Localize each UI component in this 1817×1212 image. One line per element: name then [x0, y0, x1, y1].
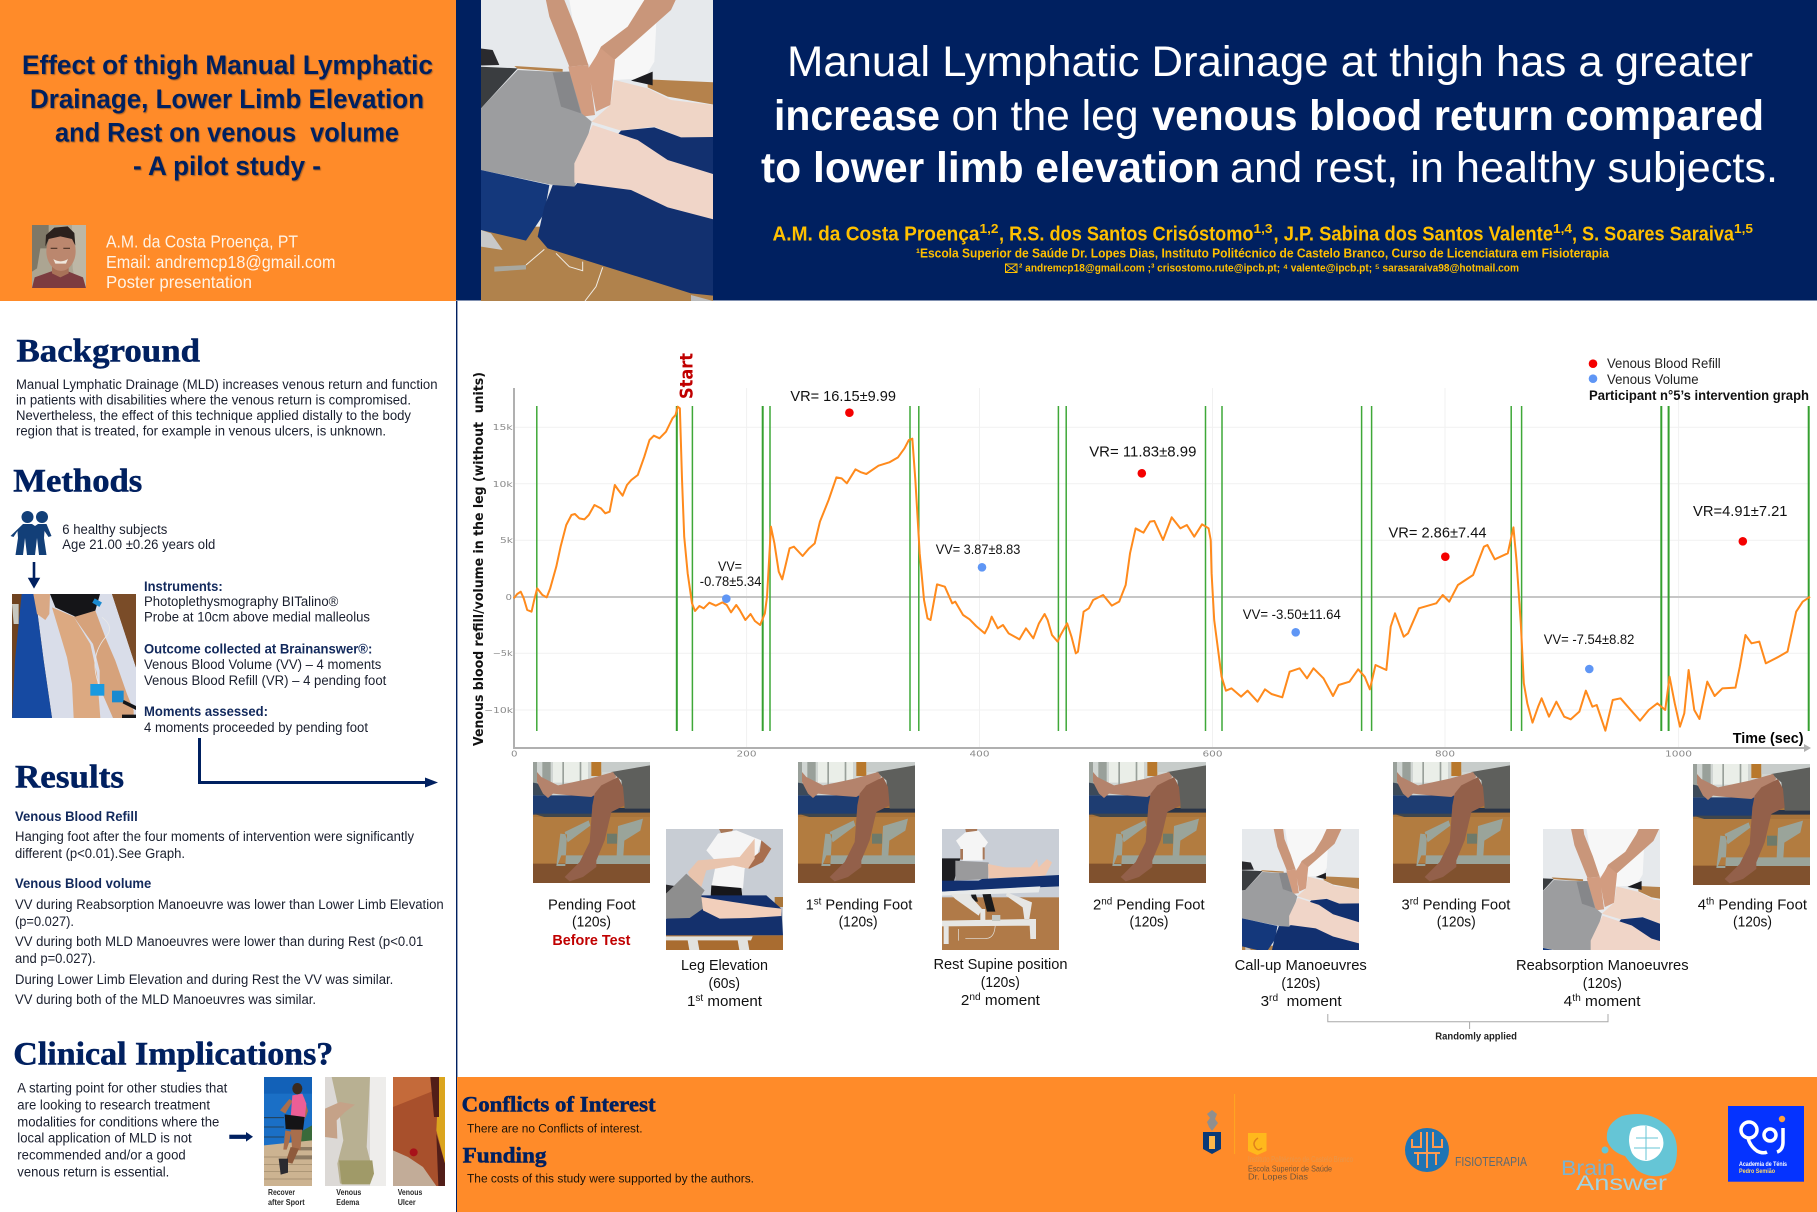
instruments text: Instruments: [144, 579, 223, 594]
headline: and rest, in healthy subjects. [1230, 144, 1778, 192]
protocol step: call-up manoeuvres [1226, 820, 1374, 1010]
affiliation: ¹Escola Superior de Saúde Dr. Lopes Dias, Instituto Politécnico de Castelo Branco, Curso de Licenciatura em Fisioterapia [916, 245, 1610, 260]
protocol step: third pending foot: Pending Foot [1418, 896, 1511, 913]
authors: 1,3 [1254, 222, 1273, 236]
protocol step: pending foot before test: Pending Foot [548, 896, 636, 913]
protocol step: pending foot before test: (120s) [572, 914, 611, 931]
legend [1589, 356, 1809, 403]
venous volume points [722, 563, 1594, 673]
heading: methods: Methods [13, 464, 142, 500]
instruments text: Probe at 10cm above medial malleolus [144, 610, 370, 625]
arrow: to conditions [229, 1132, 253, 1142]
protocol step: reabsorption manoeuvres: (120s) [1583, 975, 1622, 992]
logo: brainanswer [1561, 1114, 1677, 1195]
venous blood volume results [15, 876, 444, 1007]
panel: background [16, 334, 438, 438]
arrow: subjects to setup [30, 562, 38, 586]
clinical implications text: modalities for conditions where the [17, 1114, 219, 1129]
zero line [514, 596, 1810, 598]
photo captions [268, 1188, 423, 1207]
photo captions: Edema [336, 1198, 360, 1207]
protocol step: fourth pending foot: th [1706, 896, 1714, 907]
logo: fisioterapia: FISIOTERAPIA [1455, 1154, 1527, 1169]
author details: Email: andremcp18@gmail.com [106, 252, 336, 272]
panel: clinical implications [13, 1036, 445, 1207]
panel: title block [0, 0, 456, 301]
venous blood refill results: Venous Blood Refill [15, 809, 138, 824]
protocol step: rest supine [934, 829, 1068, 1009]
title: Drainage, Lower Limb Elevation [30, 84, 424, 114]
logo: tennis academy [1728, 1106, 1804, 1182]
headline [761, 38, 1778, 192]
protocol step: call-up manoeuvres: rd [1269, 993, 1278, 1004]
headline: Manual Lymphatic Drainage at thigh has a greater [787, 38, 1753, 86]
protocol step: second pending foot: 2 [1093, 896, 1101, 913]
protocol step: third pending foot: (120s) [1437, 914, 1476, 931]
y axis tick labels [484, 423, 513, 715]
phase markers [537, 406, 1809, 731]
photo: presenting author [32, 225, 86, 288]
photo: sensor on leg [12, 594, 136, 718]
authors: 1,4 [1553, 222, 1572, 236]
instruments text [144, 579, 370, 625]
value annotations: VR= 16.15±9.99 [790, 388, 896, 405]
subjects text: Age 21.00 ±0.26 years old [62, 537, 215, 552]
photo: venous ulcer [393, 1077, 445, 1186]
subjects text: 6 healthy subjects [62, 522, 168, 537]
y axis tick labels: −10k [484, 706, 513, 715]
title: - A pilot study - [133, 151, 321, 181]
value annotations [700, 388, 1787, 647]
outcome text: Venous Blood Refill (VR) – 4 pending foot [144, 673, 387, 688]
conflicts of interest: Conflicts of Interest [462, 1092, 656, 1117]
contact emails: ² andremcp18@gmail.com ;³ crisostomo.rute@ipcb.pt; ⁴ valente@ipcb.pt; ⁵ sarasaraiva98@hotmail.com [1019, 263, 1519, 275]
legend: Participant n°5’s intervention graph [1589, 388, 1809, 403]
photo captions: after Sport [268, 1198, 305, 1207]
venous blood volume results: and p=0.027). [15, 951, 96, 966]
value annotations: VV= -7.54±8.82 [1544, 632, 1634, 647]
funding [463, 1143, 754, 1186]
photo: venous edema [325, 1077, 386, 1186]
y axis tick labels: 15k [493, 423, 513, 432]
logo: polytechnic institute [1203, 1094, 1353, 1182]
protocol step: reabsorption manoeuvres: Reabsorption Manoeuvres [1516, 957, 1689, 974]
heading: clinical implications: Clinical Implications? [13, 1036, 333, 1072]
x axis tick labels: 0 [511, 750, 518, 758]
background text: Nevertheless, the effect of this technique applied distally to the body [16, 408, 411, 423]
headline: to lower limb elevation [761, 144, 1220, 192]
logo: brainanswer: Brain [1561, 1157, 1615, 1180]
photo captions: Venous [398, 1188, 423, 1197]
title [22, 50, 433, 181]
protocol step: second pending foot [1089, 762, 1206, 931]
conflicts of interest [462, 1092, 656, 1136]
logo: polytechnic institute: Dr. Lopes Dias [1248, 1172, 1308, 1182]
protocol step: third pending foot [1393, 762, 1511, 931]
venous blood refill results: different (p<0.01).See Graph. [15, 846, 185, 861]
protocol step: rest supine: nd [969, 992, 981, 1003]
value annotations: -0.78±5.34 [700, 574, 762, 589]
background text [16, 377, 438, 438]
axes [513, 388, 1811, 752]
value annotations: VR= 2.86±7.44 [1388, 525, 1486, 542]
venous refill points [845, 408, 1747, 561]
authors: 1,5 [1734, 222, 1753, 236]
protocol step: rest supine: (120s) [981, 974, 1020, 991]
instruments text: Photoplethysmography BITalino® [144, 594, 338, 609]
protocol step: call-up manoeuvres: 3 [1261, 993, 1269, 1010]
value annotations: VV= [718, 559, 742, 574]
x axis tick labels: 200 [736, 750, 756, 758]
panel: methods [10, 464, 387, 735]
gridlines [514, 388, 1810, 748]
protocol step: pending foot before test: Before Test [552, 932, 630, 949]
panel: footer [457, 1077, 1817, 1212]
headline: on the leg [952, 92, 1138, 140]
protocol step: first pending foot: (120s) [839, 914, 878, 931]
venous blood volume results: (p=0.027). [15, 914, 74, 929]
y axis tick labels: 0 [506, 593, 512, 602]
clinical implications text: are looking to research treatment [17, 1097, 210, 1112]
clinical implications text: A starting point for other studies that [17, 1080, 228, 1095]
logo: tennis academy: Academia de Ténis [1739, 1162, 1788, 1168]
protocol step: first pending foot: 1 [806, 896, 814, 913]
authors: 1,2 [980, 222, 999, 236]
venous blood volume results: VV during both MLD Manoeuvres were lower than during Rest (p<0.01 [15, 934, 423, 949]
heading: background: Background [16, 334, 200, 370]
y axis tick labels: 5k [500, 536, 513, 545]
protocol step: fourth pending foot: 4 [1698, 896, 1706, 913]
headline: venous blood return compared [1152, 92, 1764, 140]
funding: The costs of this study were supported by the authors. [467, 1174, 754, 1186]
logo: tennis academy: Pedro Semião [1739, 1169, 1775, 1175]
column divider [456, 301, 457, 1212]
clinical implications text: recommended and/or a good [17, 1147, 186, 1162]
x axis tick labels: 600 [1202, 750, 1222, 758]
author details: Poster presentation [106, 272, 252, 292]
protocol step: second pending foot: Pending Foot [1112, 896, 1205, 913]
moments text: 4 moments proceeded by pending foot [144, 720, 368, 735]
background text: in patients with disabilities where the venous return is compromised. [16, 392, 411, 407]
protocol step: fourth pending foot [1693, 764, 1810, 931]
authors: A.M. da Costa Proença [772, 224, 980, 246]
protocol step: reabsorption manoeuvres [1504, 808, 1708, 1034]
protocol step: second pending foot: (120s) [1130, 914, 1168, 931]
venous blood refill results [15, 809, 414, 861]
protocol step: first pending foot: Pending Foot [821, 896, 913, 913]
venous blood volume results: VV during both of the MLD Manoeuvres was similar. [15, 992, 316, 1007]
legend: Venous Blood Refill [1607, 356, 1721, 371]
x axis tick labels: 800 [1435, 750, 1455, 758]
author details: A.M. da Costa Proença, PT [106, 232, 298, 252]
heading: results: Results [15, 759, 124, 795]
venous blood volume results: VV during Reabsorption Manoeuvre was lower than Lower Limb Elevation [15, 897, 444, 912]
protocol step: reabsorption manoeuvres: th [1572, 993, 1581, 1004]
icon: envelope [1006, 264, 1017, 272]
protocol step: second pending foot: nd [1101, 896, 1112, 907]
value annotations: VR= 11.83±8.99 [1089, 444, 1196, 461]
venous blood refill results: Hanging foot after the four moments of intervention were significantly [15, 829, 414, 844]
protocol step: leg elevation: moment [703, 993, 763, 1010]
funding: Funding [463, 1143, 546, 1168]
y axis title: Venous blood refill/volume in the leg (without units) [471, 372, 487, 746]
clinical implications text [17, 1080, 228, 1179]
protocol step: reabsorption manoeuvres: moment [1581, 993, 1641, 1010]
outcome text: Outcome collected at Brainanswer®: [144, 642, 372, 657]
headline: increase [774, 92, 940, 140]
protocol step: pending foot before test [533, 762, 650, 949]
protocol step: call-up manoeuvres: Call-up Manoeuvres [1235, 957, 1367, 974]
photo captions: Recover [268, 1188, 295, 1197]
protocol step: fourth pending foot: Pending Foot [1714, 896, 1808, 913]
start label: Start [676, 353, 698, 399]
protocol step: rest supine: 2 [961, 992, 969, 1009]
logo: brainanswer: Answer [1576, 1172, 1667, 1195]
moments text: Moments assessed: [144, 704, 268, 719]
value annotations: VV= -3.50±11.64 [1243, 607, 1341, 622]
conflicts of interest: There are no Conflicts of interest. [467, 1124, 643, 1136]
value annotations: VV= 3.87±8.83 [936, 542, 1020, 557]
protocol step: first pending foot [798, 762, 915, 931]
protocol step: third pending foot: rd [1410, 896, 1418, 907]
signal curve [514, 407, 1810, 731]
protocol step: call-up manoeuvres: (120s) [1281, 975, 1320, 992]
logo: polytechnic institute: Instituto Politécnico de Castelo Branco [1248, 1155, 1353, 1164]
chart: venous refill and volume over time [471, 353, 1811, 758]
protocol step: leg elevation: 1 [687, 993, 695, 1010]
clinical implications text: venous return is essential. [17, 1164, 169, 1179]
x axis tick labels: 400 [970, 750, 990, 758]
venous blood volume results: Venous Blood volume [15, 876, 151, 891]
protocol step: rest supine: Rest Supine position [934, 956, 1068, 973]
clinical implications text: local application of MLD is not [17, 1130, 192, 1145]
title: Effect of thigh Manual Lymphatic [22, 50, 433, 80]
protocol step: leg elevation [666, 829, 783, 1010]
authors [772, 222, 1753, 246]
icon: two people [10, 511, 52, 555]
author details [106, 232, 336, 292]
legend: Venous Volume [1607, 372, 1699, 387]
venous blood volume results: During Lower Limb Elevation and during Rest the VV was similar. [15, 972, 393, 987]
authors: , S. Soares Saraiva [1572, 224, 1735, 246]
panel: header banner [441, 0, 1817, 307]
arrow: methods to graph [200, 738, 438, 788]
protocol step: leg elevation: (60s) [708, 975, 740, 992]
x axis tick labels: 1000 [1665, 750, 1692, 758]
photo: thigh massage [481, 0, 713, 301]
background text: region that is treated, for example in venous ulcers, is unknown. [16, 423, 386, 438]
protocol step: third pending foot: 3 [1402, 896, 1410, 913]
protocol step: fourth pending foot: (120s) [1733, 914, 1772, 931]
subjects text [62, 522, 215, 552]
background text: Manual Lymphatic Drainage (MLD) increases venous return and function [16, 377, 438, 392]
y axis tick labels: 10k [493, 480, 513, 489]
protocol step: leg elevation: Leg Elevation [681, 957, 768, 974]
authors: , J.P. Sabina dos Santos Valente [1274, 224, 1553, 246]
photo captions: Venous [336, 1188, 362, 1197]
title: and Rest on venous volume [55, 118, 399, 148]
y axis tick labels: −5k [493, 649, 513, 658]
x axis tick labels [511, 750, 1692, 758]
photo: runner [264, 1077, 312, 1186]
x axis title: Time (sec) [1733, 731, 1804, 747]
protocol step: reabsorption manoeuvres: 4 [1564, 993, 1572, 1010]
moments text [144, 704, 368, 735]
protocol step: rest supine: moment [981, 992, 1041, 1009]
protocol step: call-up manoeuvres: moment [1278, 993, 1342, 1010]
logo: fisioterapia [1405, 1128, 1527, 1172]
outcome text [144, 642, 387, 688]
logo: polytechnic institute: Escola Superior de Saúde [1248, 1164, 1332, 1174]
photo captions: Ulcer [398, 1198, 416, 1207]
value annotations: VR=4.91±7.21 [1693, 503, 1788, 520]
authors: , R.S. dos Santos Crisóstomo [999, 224, 1254, 246]
bracket: randomly applied [1328, 1014, 1608, 1043]
bracket: randomly applied: Randomly applied [1435, 1032, 1517, 1043]
outcome text: Venous Blood Volume (VV) – 4 moments [144, 657, 382, 672]
protocol step: leg elevation: st [695, 993, 703, 1004]
panel: results [15, 759, 444, 1007]
protocol step: first pending foot: st [814, 896, 822, 907]
